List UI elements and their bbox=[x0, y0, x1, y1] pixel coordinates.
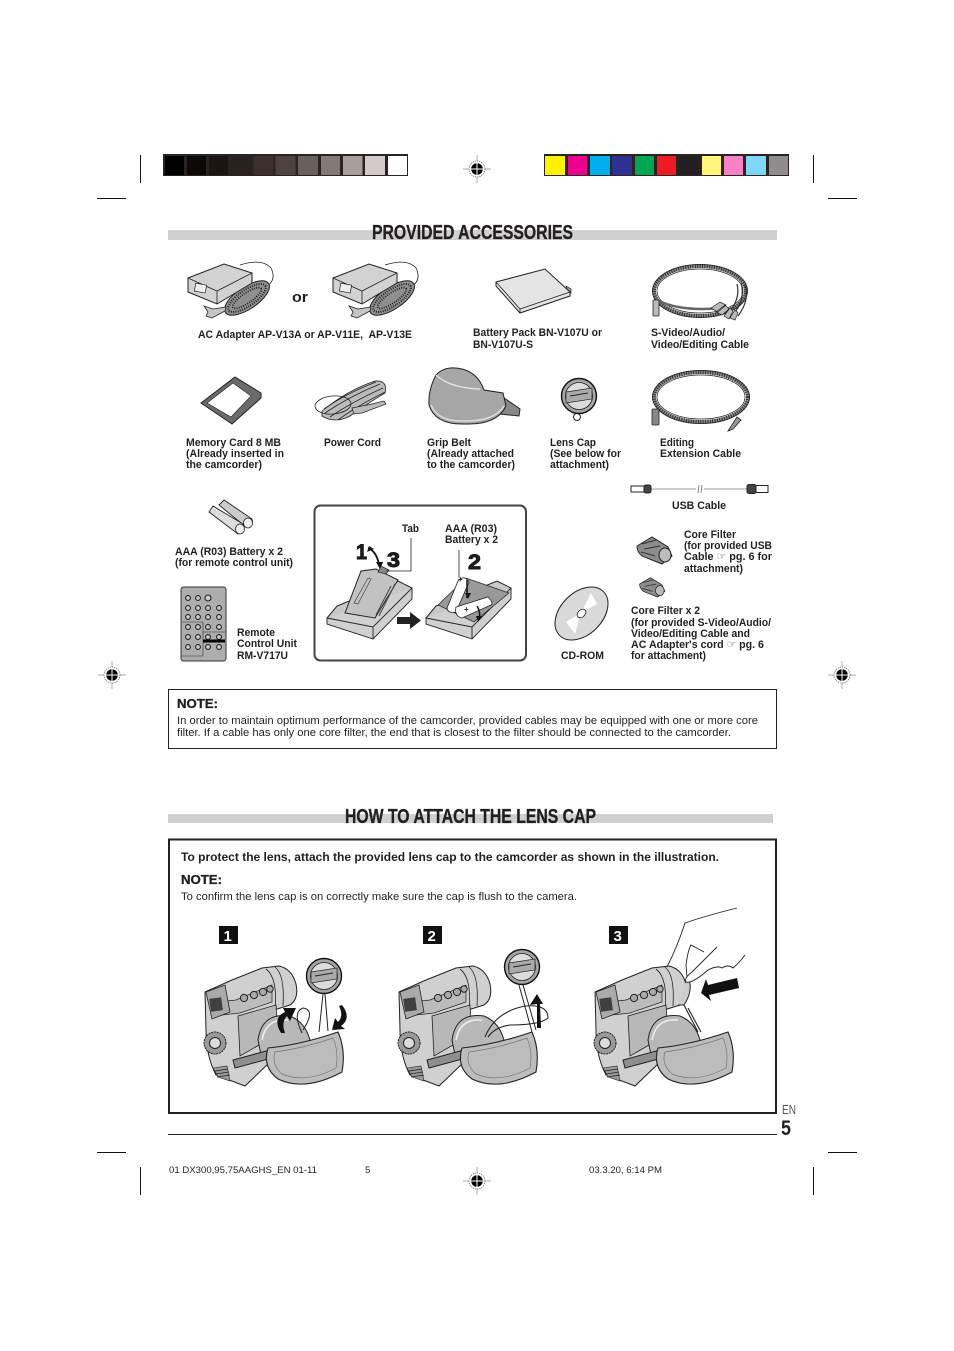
heading: provided accessories bbox=[168, 222, 777, 244]
item: core filter for USB: (for provided USB bbox=[684, 540, 772, 552]
registration mark: bottom bbox=[463, 1167, 491, 1195]
item: remote control: RM-V717U bbox=[237, 650, 288, 662]
heading: provided accessories: PROVIDED ACCESSORIES bbox=[372, 222, 573, 244]
item: grip belt: to the camcorder) bbox=[427, 459, 515, 471]
item: grip belt: Grip Belt bbox=[427, 437, 471, 449]
item: remote control: Control Unit bbox=[237, 638, 297, 650]
remote tray with cover opened bbox=[327, 538, 412, 639]
item: memory card bbox=[186, 377, 284, 471]
step 3 bbox=[594, 908, 745, 1086]
grayscale colour bar bbox=[163, 154, 408, 176]
item: AC adapter: or bbox=[292, 289, 308, 306]
item: battery pack: BN-V107U-S bbox=[473, 339, 533, 351]
item: battery pack: Battery Pack BN-V107U or bbox=[473, 327, 602, 339]
note heading: NOTE: bbox=[181, 872, 222, 887]
remote tray with batteries inserted: 2 bbox=[468, 551, 481, 574]
note box: core filters bbox=[168, 690, 776, 748]
item: core filter x 2: for attachment) bbox=[631, 650, 706, 662]
footer print info: 03.3.20, 6:14 PM bbox=[589, 1165, 662, 1176]
remote tray with batteries inserted: + bbox=[458, 575, 463, 584]
item: AC adapter: AC Adapter AP-V13A or AP-V11E, AP-V13E bbox=[198, 329, 412, 341]
item: S-Video cable bbox=[651, 264, 749, 351]
item: CD-ROM: CD-ROM bbox=[561, 650, 604, 662]
arrow between trays bbox=[397, 612, 421, 629]
arrow: push bbox=[701, 978, 739, 1001]
note text: To confirm the lens cap is on correctly make sure the cap is flush to the camera. bbox=[181, 891, 577, 903]
item: USB cable: USB Cable bbox=[672, 500, 726, 512]
registration mark: top bbox=[463, 155, 491, 183]
panel: remote battery installation: Tab bbox=[402, 523, 419, 535]
step 3: 3 bbox=[614, 928, 622, 945]
item: editing extension cable: Extension Cable bbox=[660, 448, 741, 460]
instruction text: To protect the lens, attach the provided lens cap to the camcorder as shown in the illustration. bbox=[181, 852, 719, 864]
item: core filter x 2: Video/Editing Cable and bbox=[631, 628, 750, 640]
remote tray with batteries inserted: + bbox=[464, 605, 469, 614]
remote tray with cover opened: 3 bbox=[387, 549, 400, 572]
item: S-Video cable: Video/Editing Cable bbox=[651, 339, 749, 351]
item: power cord: Power Cord bbox=[324, 437, 381, 449]
item: grip belt: (Already attached bbox=[427, 448, 514, 460]
process colour bar bbox=[544, 154, 789, 176]
item: battery pack bbox=[473, 269, 602, 351]
step 1: 1 bbox=[224, 928, 232, 945]
panel: remote battery installation: Battery x 2 bbox=[445, 534, 498, 546]
item: lens cap: attachment) bbox=[550, 459, 609, 471]
note box: core filters: NOTE: bbox=[177, 696, 218, 711]
item: core filter for USB: Cable ☞ pg. 6 for bbox=[684, 550, 772, 563]
remote tray with batteries inserted bbox=[426, 550, 511, 639]
heading: how to attach the lens cap: HOW TO ATTACH THE LENS CAP bbox=[345, 806, 596, 828]
item: USB cable bbox=[631, 484, 768, 512]
item: editing extension cable: Editing bbox=[660, 437, 694, 449]
item: AAA batteries: AAA (R03) Battery x 2 bbox=[175, 546, 283, 558]
item: CD-ROM bbox=[545, 577, 618, 662]
heading: how to attach the lens cap bbox=[168, 806, 773, 828]
item: AAA batteries bbox=[175, 500, 293, 569]
item: grip belt bbox=[427, 368, 520, 471]
item: power cord bbox=[314, 381, 386, 449]
item: AC adapter bbox=[188, 262, 420, 341]
registration mark: left bbox=[98, 661, 126, 689]
item: editing extension cable bbox=[652, 370, 750, 460]
item: core filter x 2 bbox=[631, 578, 771, 662]
item: memory card: Memory Card 8 MB bbox=[186, 437, 281, 449]
item: core filter x 2: (for provided S-Video/Audio/ bbox=[631, 617, 771, 629]
footer print info: 5 bbox=[365, 1165, 370, 1176]
note box: core filters: filter. If a cable has only one core filter, the end that is closest to the filter should be connected to the camcorder. bbox=[177, 727, 731, 739]
item: remote control bbox=[181, 587, 297, 662]
registration mark: right bbox=[828, 661, 856, 689]
note box: core filters: In order to maintain optimum performance of the camcorder, provided cables may be equipped with one or more core bbox=[177, 715, 758, 727]
step 1 bbox=[204, 926, 347, 1086]
item: core filter x 2: AC Adapter's cord ☞ pg. 6 bbox=[631, 638, 764, 651]
item: memory card: the camcorder) bbox=[186, 459, 262, 471]
footer print info bbox=[169, 1165, 662, 1176]
step 2 bbox=[398, 926, 548, 1086]
item: AAA batteries: (for remote control unit) bbox=[175, 557, 293, 569]
panel: remote battery installation bbox=[314, 506, 526, 660]
item: core filter for USB: attachment) bbox=[684, 563, 743, 575]
hand bbox=[667, 908, 745, 982]
panel: remote battery installation: AAA (R03) bbox=[445, 523, 497, 535]
item: lens cap bbox=[550, 378, 621, 471]
step 2: 2 bbox=[428, 928, 436, 945]
page number: EN bbox=[782, 1103, 796, 1117]
page number bbox=[781, 1103, 796, 1140]
item: core filter x 2: Core Filter x 2 bbox=[631, 605, 700, 617]
page number: 5 bbox=[781, 1117, 791, 1140]
item: core filter for USB bbox=[637, 529, 772, 575]
item: memory card: (Already inserted in bbox=[186, 448, 284, 460]
item: lens cap: (See below for bbox=[550, 448, 621, 460]
item: remote control: Remote bbox=[237, 627, 275, 639]
remote tray with cover opened: 1 bbox=[356, 541, 367, 564]
item: core filter for USB: Core Filter bbox=[684, 529, 736, 541]
footer print info: 01 DX300,95,75AAGHS_EN 01-11 bbox=[169, 1165, 317, 1176]
item: S-Video cable: S-Video/Audio/ bbox=[651, 327, 725, 339]
printer crop marks bbox=[97, 155, 857, 1195]
panel: lens cap instructions bbox=[169, 840, 776, 1113]
item: lens cap: Lens Cap bbox=[550, 437, 596, 449]
